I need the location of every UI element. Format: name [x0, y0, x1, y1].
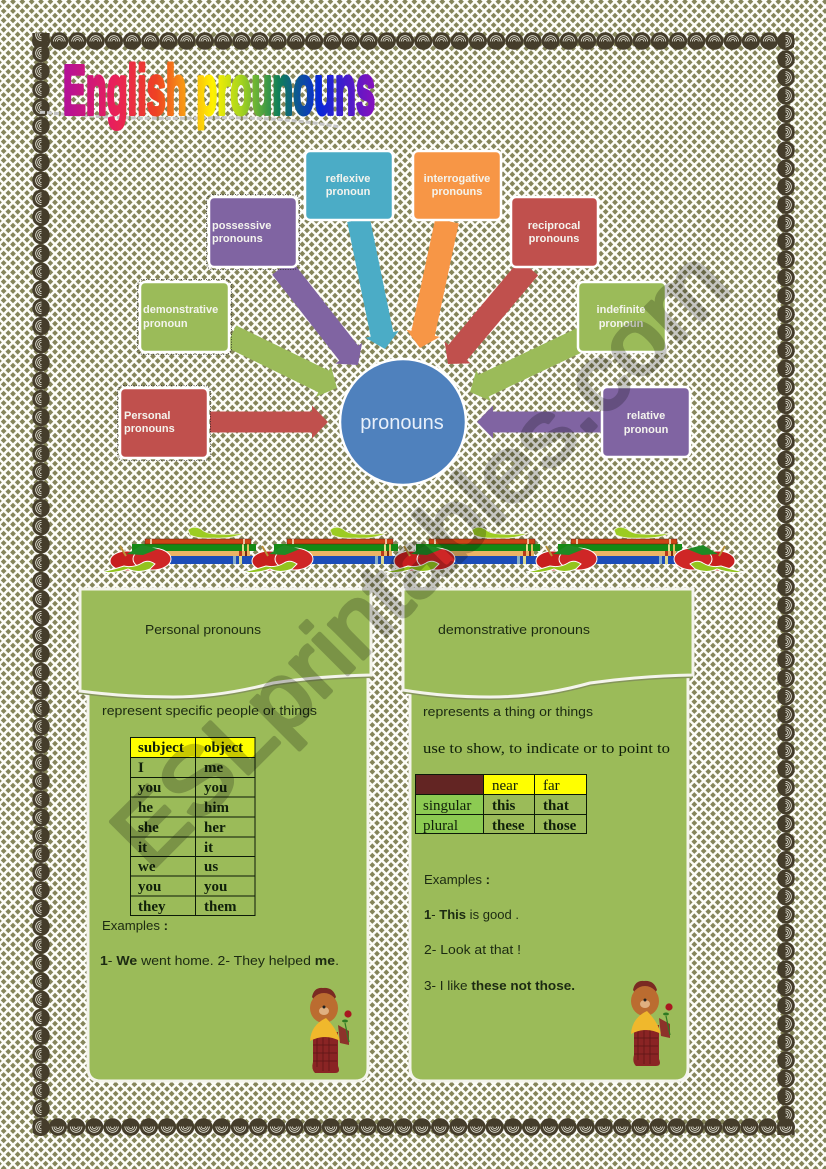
panel: personal pronouns	[80, 589, 371, 1081]
box: personal	[118, 386, 210, 460]
table: subject and object pronouns: object	[204, 740, 243, 756]
box: demonstrative: demonstrative	[143, 304, 218, 316]
table: subject and object pronouns: you	[138, 879, 161, 895]
box: demonstrative: pronoun	[143, 318, 188, 330]
infographic page: English prounouns	[63, 51, 375, 129]
arrow: relative	[477, 406, 605, 438]
table: subject and object pronouns: me	[204, 760, 223, 776]
table: subject and object pronouns: subject	[138, 740, 184, 756]
table: subject and object pronouns: I	[138, 760, 144, 776]
box: reflexive: reflexive	[326, 173, 370, 185]
table: near and far: singular	[423, 798, 471, 814]
table: near and far: plural	[423, 818, 458, 834]
box: personal: pronouns	[124, 423, 175, 435]
arrow: indefinite	[463, 324, 589, 407]
table: subject and object pronouns: we	[138, 859, 156, 875]
watermark: ESLprintables.com	[92, 231, 748, 886]
table: subject and object pronouns: him	[204, 800, 230, 816]
arrow: demonstrative	[223, 321, 344, 403]
panel body	[88, 672, 368, 1081]
table: subject and object pronouns: you	[204, 780, 227, 796]
diagram: pronoun types	[118, 151, 690, 485]
box: reflexive: pronoun	[326, 186, 371, 198]
box: relative: relative	[627, 410, 665, 422]
table: near and far: those	[543, 818, 577, 834]
box: reciprocal	[511, 197, 598, 267]
arrow: interrogative	[403, 217, 464, 352]
box: interrogative: interrogative	[424, 173, 490, 185]
arrow: reflexive	[342, 216, 402, 352]
box: indefinite: indefinite	[597, 304, 645, 316]
arrow: possessive	[268, 257, 371, 375]
table: subject and object pronouns: you	[138, 780, 161, 796]
table: near and far: that	[543, 798, 569, 814]
panel header	[403, 589, 693, 699]
arrow: reciprocal	[435, 257, 542, 375]
box: interrogative: pronouns	[432, 186, 482, 198]
panel header	[80, 589, 371, 699]
table: subject and object pronouns: you	[204, 879, 227, 895]
box: personal: Personal	[124, 410, 170, 422]
box: interrogative	[413, 151, 501, 220]
central circle: pronouns	[360, 412, 444, 434]
table: subject and object pronouns: they	[138, 899, 166, 915]
box: possessive: pronouns	[212, 233, 263, 245]
table: subject and object pronouns: us	[204, 859, 218, 875]
panel: demonstrative pronouns	[403, 589, 693, 1081]
box: indefinite	[578, 282, 666, 352]
title	[40, 51, 375, 129]
table: near and far: this	[492, 798, 516, 814]
arrow: personal	[210, 406, 328, 438]
icon: bear with flower	[631, 981, 673, 1066]
table: subject and object pronouns: them	[204, 899, 237, 915]
box: reciprocal: pronouns	[529, 233, 579, 245]
panel body	[410, 672, 688, 1081]
decorative books and apples divider	[100, 527, 745, 573]
box: demonstrative	[138, 280, 232, 354]
central circle	[340, 359, 466, 485]
example 2: 2- Look at that !	[424, 942, 521, 957]
panel header: demonstrative pronouns	[438, 622, 591, 637]
table: near and far: these	[492, 818, 525, 834]
table: near and far: far	[543, 778, 560, 794]
box: reflexive	[305, 151, 393, 220]
table: near and far	[416, 774, 586, 834]
table: subject and object pronouns	[130, 738, 255, 916]
box: possessive: possessive	[212, 220, 271, 232]
box: relative: pronoun	[624, 424, 669, 436]
example 3: 3- I like these not those.	[424, 978, 575, 993]
box: indefinite: pronoun	[599, 318, 644, 330]
table: subject and object pronouns: he	[138, 800, 153, 816]
box: reciprocal: reciprocal	[528, 220, 580, 232]
table: subject and object pronouns: her	[204, 820, 226, 836]
examples heading: Examples :	[424, 872, 490, 887]
table: near and far: near	[492, 778, 518, 794]
usage text: use to show, to indicate or to point to	[423, 741, 670, 757]
table: subject and object pronouns: it	[204, 840, 213, 856]
table: subject and object pronouns: she	[138, 820, 159, 836]
definition text: represent specific people or things	[102, 703, 318, 718]
panel header: Personal pronouns	[145, 622, 262, 637]
example 1: 1- This is good .	[424, 907, 519, 922]
examples: 1- We went home. 2- They helped me.	[100, 953, 339, 968]
icon: bear with flower	[310, 988, 352, 1073]
examples heading: Examples :	[102, 918, 168, 933]
table: subject and object pronouns: it	[138, 840, 147, 856]
box: possessive	[206, 194, 300, 270]
definition text: represents a thing or things	[423, 704, 594, 719]
box: relative	[602, 387, 690, 457]
